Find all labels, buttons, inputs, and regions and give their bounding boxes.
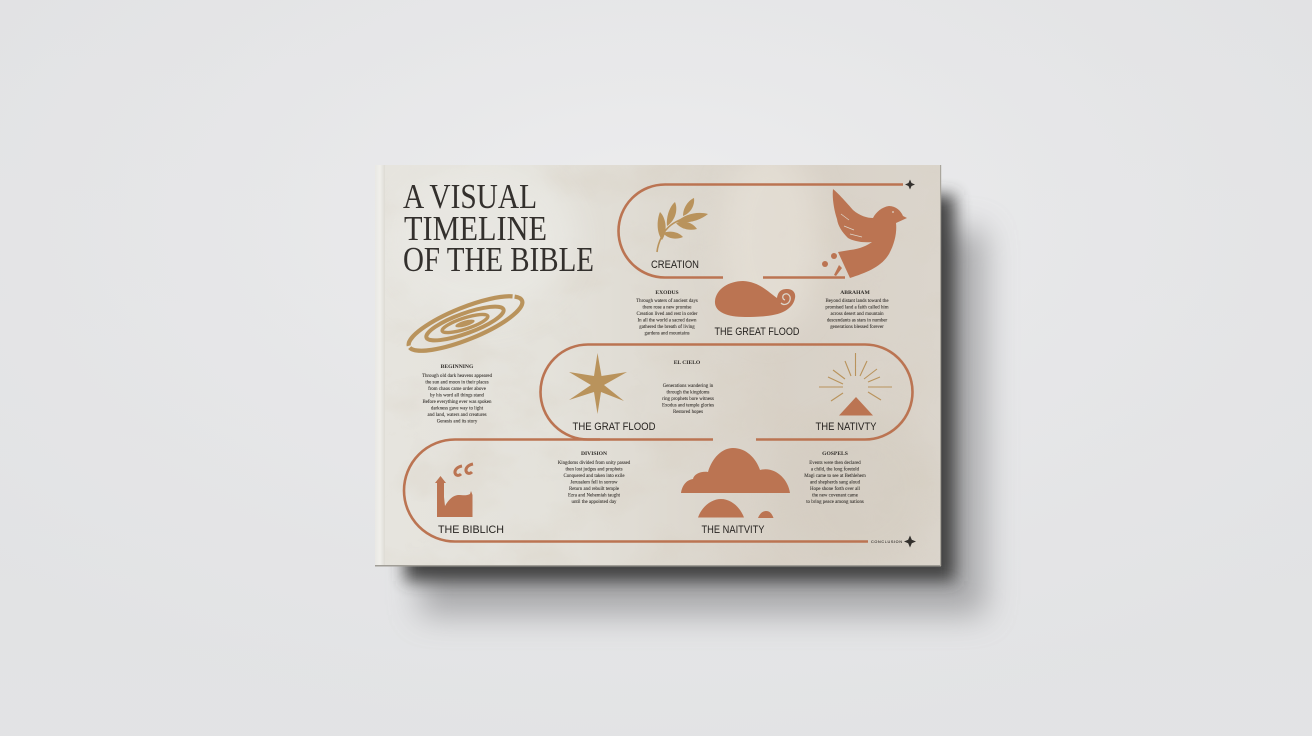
section text: right of flood: ABRAHAM — [840, 290, 870, 296]
section text: left of flood: Creation lived and rest in order — [637, 312, 698, 317]
label: the great flood (middle): THE GRAT FLOOD — [572, 421, 656, 433]
timeline track: bottom loop — [404, 440, 868, 542]
icon: end star top — [905, 180, 915, 190]
icon: sunrise over mountain — [819, 353, 892, 416]
section text: lower left: Ezra and Nehemiah taught — [568, 494, 621, 498]
section text: left of flood: gardens and mountains — [644, 332, 690, 336]
section text: left of flood — [636, 290, 698, 336]
timeline track: middle loop — [541, 344, 913, 440]
section text: lower right: the new covenant came — [812, 494, 858, 498]
timeline track: top loop — [618, 184, 903, 278]
icon: dove — [822, 189, 907, 278]
book drop shadow — [405, 195, 985, 615]
label: the nativity (bottom): THE NAITVITY — [702, 524, 765, 536]
section text: left of flood: Through waters of ancient days — [636, 299, 698, 304]
section text: galaxy: and land, waters and creatures — [427, 413, 487, 418]
section text: lower left: Return and rebuilt temple — [569, 487, 619, 492]
section text: right of flood: across desert and mountain — [830, 312, 884, 317]
section text: left of flood: In all the world a sacred dawn — [638, 318, 697, 324]
section text: lower right — [804, 451, 866, 505]
section text: lower left — [558, 451, 631, 505]
title: A VISUAL — [403, 177, 537, 216]
section text: right of flood: promised land a faith called him — [825, 306, 889, 310]
title: TIMELINE — [404, 209, 547, 248]
section text: lower right: a child, the long foretold — [811, 468, 860, 472]
section text: lower left: DIVISION — [581, 451, 607, 457]
icon: eight point star — [569, 353, 627, 414]
section text: galaxy: BEGINNING — [441, 364, 474, 370]
label: the bible church: THE BIBLICH — [438, 524, 504, 536]
section text: galaxy: darkness gave way to light — [431, 406, 484, 412]
section text: lower right: Events were then declared — [809, 461, 861, 466]
book page — [375, 145, 941, 570]
section text: lower left: Kingdoms divided from unity passed — [558, 461, 631, 466]
section text: left of flood: there rose a new promise — [643, 306, 691, 310]
section text: lower right: Magi came to see at Bethlehem — [804, 474, 866, 479]
section text: middle — [662, 360, 714, 415]
icon: spiral galaxy — [403, 286, 528, 361]
section text: galaxy: Through old dark heavens appeared — [422, 374, 493, 379]
section text: lower right: and shepherds sang aloud — [810, 480, 861, 486]
section text: galaxy: Before everything ever was spoken — [422, 400, 492, 405]
section text: middle: EL CIELO — [674, 360, 701, 366]
section text: galaxy: by his word all things stand — [430, 394, 485, 398]
section text: lower left: until the appointed day — [572, 500, 617, 505]
end marker bottom — [871, 536, 916, 548]
icon: olive branch — [657, 198, 708, 252]
section text: middle: through the kingdoms — [667, 390, 710, 396]
section text: lower left: Conquered and taken into exile — [563, 474, 625, 479]
section text: left of flood: gathered the breath of living — [639, 325, 695, 330]
label: the great flood: THE GREAT FLOOD — [714, 326, 800, 338]
section text: lower left: then lost judges and prophets — [565, 468, 623, 472]
end marker bottom: CONCLUSION — [871, 540, 902, 544]
section text: galaxy: Genesis and its story — [437, 420, 478, 424]
icon: church with quotation marks — [435, 464, 473, 517]
section text: right of flood: descendants as stars in number — [827, 318, 888, 324]
title — [403, 177, 594, 279]
section text: lower right: Hope shone forth over all — [810, 487, 861, 492]
section text: right of flood: generations blessed forever — [830, 325, 884, 330]
section text: right of flood — [825, 290, 889, 330]
section text: lower right: to bring peace among nations — [806, 500, 864, 505]
section text: galaxy: from chaos came order above — [428, 387, 486, 392]
section text: galaxy: the sun and moon in their places — [425, 380, 489, 386]
title: OF THE BIBLE — [403, 240, 594, 279]
section text: galaxy — [422, 364, 493, 424]
section text: middle: Exodus and temple glories — [662, 404, 714, 408]
section text: middle: Restored hopes — [673, 410, 703, 415]
section text: middle: Generations wandering in — [663, 384, 714, 389]
icon: cloud with hills — [681, 448, 790, 518]
icon: whale / ark — [715, 281, 795, 317]
label: the nativity (middle): THE NATIVTY — [816, 421, 877, 433]
section text: lower right: GOSPELS — [822, 451, 848, 457]
section text: left of flood: EXODUS — [655, 290, 679, 296]
section text: lower left: Jerusalem fell in sorrow — [570, 480, 618, 486]
section text: right of flood: Beyond distant lands toward the — [825, 299, 889, 304]
label: creation: CREATION — [651, 259, 699, 271]
section text: middle: ring prophets bore witness — [662, 397, 714, 402]
